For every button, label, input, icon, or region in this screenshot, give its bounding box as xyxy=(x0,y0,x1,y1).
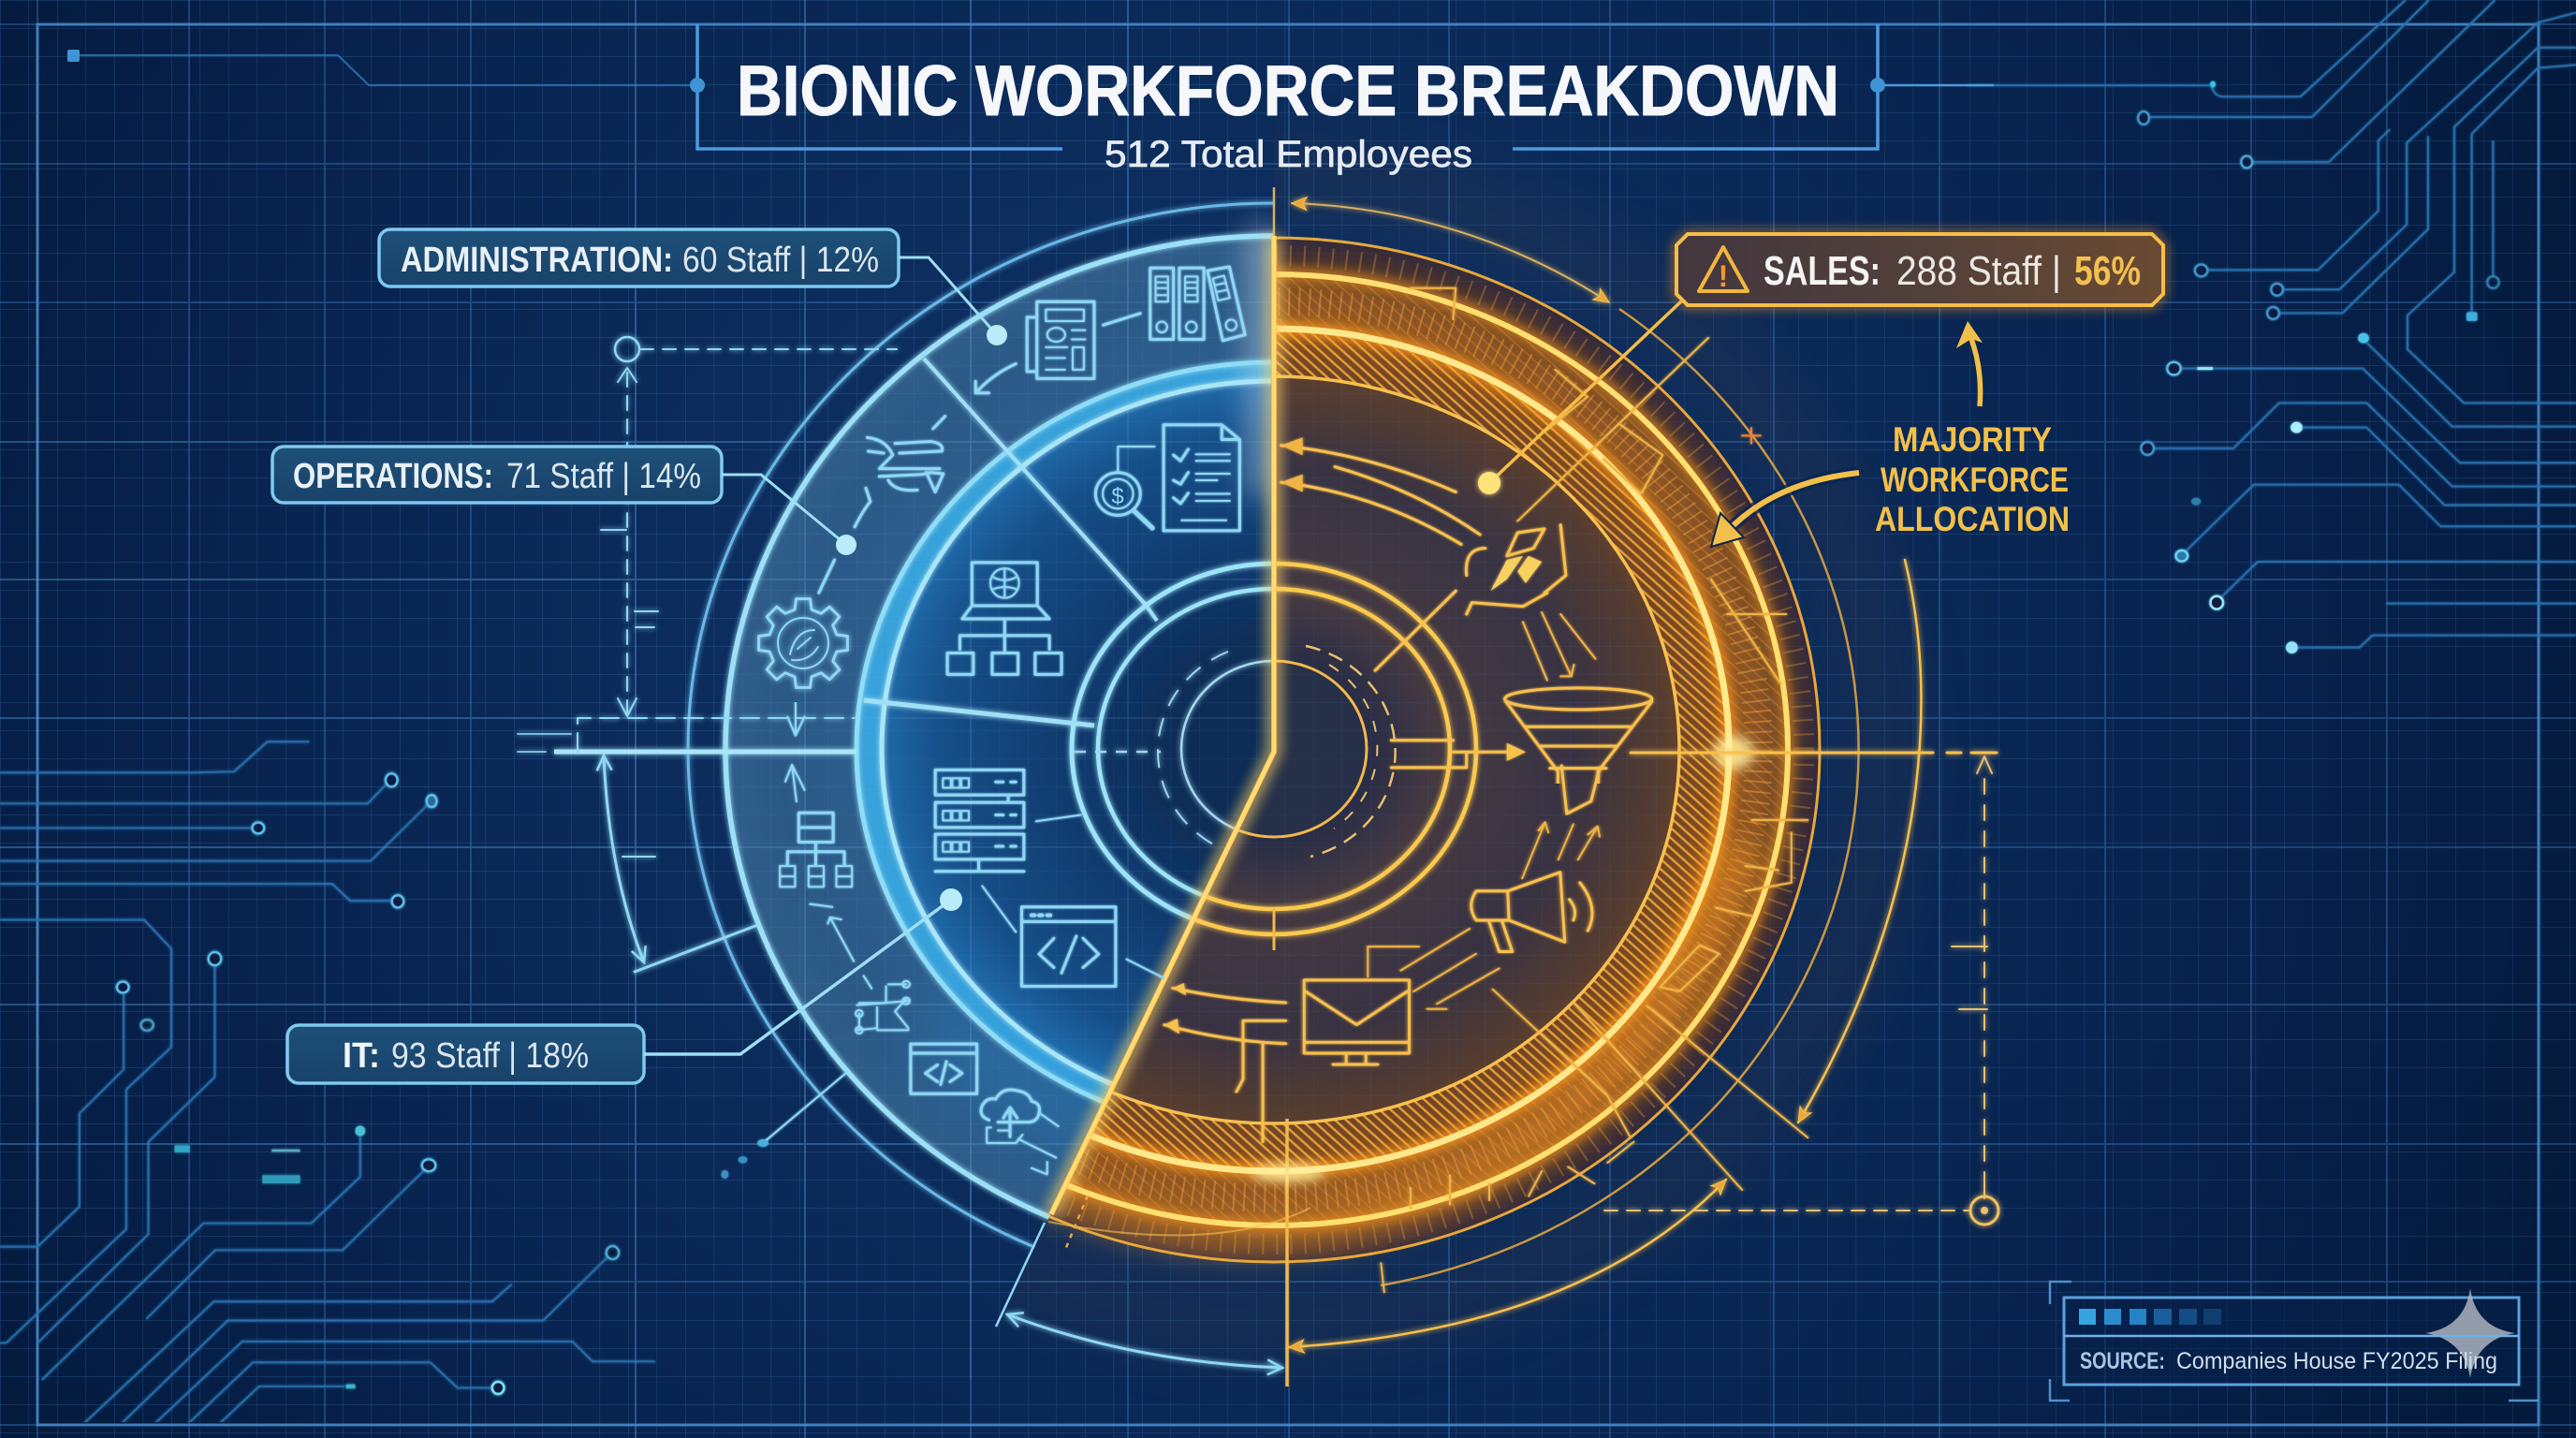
circuit traces: upper right xyxy=(1966,0,2576,653)
title frame xyxy=(690,24,1994,149)
source box xyxy=(2050,1282,2539,1401)
center seam: sales boundary xyxy=(1051,236,1274,1214)
icon: IT network tree xyxy=(780,702,871,989)
annotation: majority workforce allocation: WORKFORCE xyxy=(1881,461,2069,499)
circuit traces: top left xyxy=(67,50,697,85)
icon: code window small xyxy=(911,1044,977,1093)
dial: orange half xyxy=(945,0,2576,1438)
icon: warning triangle: ! xyxy=(1719,259,1728,293)
sales wedge tech details xyxy=(1381,820,1808,1292)
arrow: up to sales callout xyxy=(1956,321,1983,406)
callout: operations: 71 Staff | 14% xyxy=(506,457,701,496)
icon: sparkle xyxy=(2425,1288,2515,1378)
icon: operations gear xyxy=(759,599,847,687)
icon: sales team sketch xyxy=(1466,525,1595,681)
icon: operations flow sketch xyxy=(819,417,945,593)
icon: server stack xyxy=(935,770,1164,978)
dimension annotations: blue xyxy=(518,337,1282,1368)
icon: dollar sign: $ xyxy=(1111,484,1124,509)
icon: sales email monitor xyxy=(1164,929,1500,1142)
title: BIONIC WORKFORCE BREAKDOWN xyxy=(737,51,1839,131)
annotation: majority workforce allocation xyxy=(1875,420,2070,538)
callout: administration: ADMINISTRATION: xyxy=(401,241,673,280)
callout: administration: 60 Staff | 12% xyxy=(682,241,879,280)
icon: warning triangle xyxy=(1699,247,1748,293)
callout: IT: 93 Staff | 18% xyxy=(391,1036,589,1076)
callout: operations: OPERATIONS: xyxy=(293,457,493,496)
callout: sales: SALES: xyxy=(1764,248,1881,294)
source box: SOURCE: xyxy=(2080,1348,2165,1374)
blue ring lines xyxy=(550,198,1273,1251)
callout: administration xyxy=(379,229,1007,345)
annotation: majority workforce allocation: MAJORITY xyxy=(1893,420,2052,459)
orange flow arrows xyxy=(1281,437,1526,768)
wedge dividers xyxy=(924,359,1157,621)
subtitle: 512 Total Employees xyxy=(1105,134,1472,175)
circuit traces: lower left xyxy=(0,741,655,1424)
icon: cloud upload xyxy=(722,1073,1059,1179)
arrow: to sales ring xyxy=(1711,473,1859,547)
icon: sales megaphone xyxy=(1471,822,1600,952)
icon: funnel stem xyxy=(1561,766,1600,814)
callout: operations xyxy=(272,447,856,555)
callout: sales: 288 Staff | xyxy=(1896,248,2061,294)
callout: IT xyxy=(287,888,962,1083)
icon: checklist and magnifier xyxy=(1095,425,1239,531)
annotation: majority workforce allocation: ALLOCATION xyxy=(1875,500,2070,538)
icon: administration binders xyxy=(975,267,1245,393)
callout: sales xyxy=(1478,234,2163,494)
callout: sales: 56% xyxy=(2074,248,2141,294)
dial: blue half xyxy=(0,0,1274,1438)
source box: Companies House FY2025 Filing xyxy=(2176,1348,2497,1374)
orange ring lines xyxy=(1048,236,1860,1286)
icon: sales funnel xyxy=(1504,688,1652,796)
callout: IT: IT: xyxy=(343,1036,380,1076)
icon: IT workflow sketch xyxy=(856,981,910,1034)
icon: code window large xyxy=(1021,907,1116,987)
icon: laptop and org tree xyxy=(947,563,1061,674)
icon: administration document xyxy=(1027,301,1094,378)
dimension annotations: orange xyxy=(1289,203,1998,1347)
